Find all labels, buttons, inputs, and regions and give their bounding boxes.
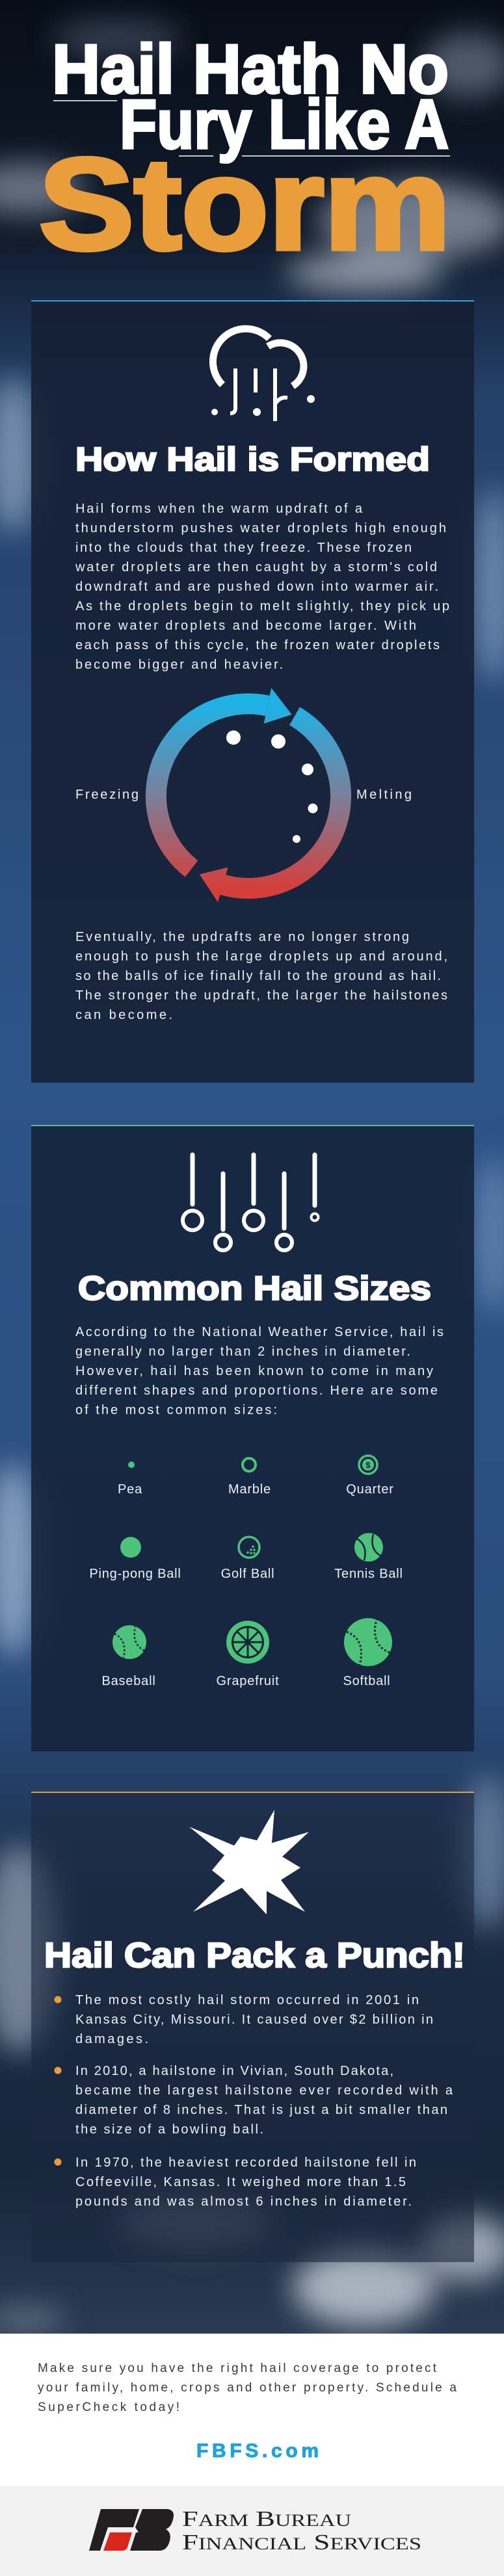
- bullet list: hail facts: became the largest hailstone ever recorded with a: [75, 2083, 453, 2098]
- icon: ping-pong ball: [120, 1537, 141, 1558]
- grid: hail sizes: Tennis Ball: [334, 1567, 403, 1581]
- text block: formation paragraph: Hail forms when the warm updraft of a: [75, 502, 363, 516]
- text block: formation paragraph: [75, 502, 449, 672]
- text block: eventually paragraph: can become.: [75, 1008, 172, 1022]
- grid: hail sizes: [89, 1456, 403, 1688]
- logo: Farm Bureau Financial Services: FARM B UREAU: [182, 2507, 351, 2531]
- icon: tennis ball: [354, 1533, 383, 1562]
- icon: quarter: [359, 1456, 377, 1474]
- text block: call to action: Make sure you have the right hail coverage to protect: [38, 2362, 437, 2375]
- icon: golf ball: [239, 1537, 259, 1558]
- grid: hail sizes: Golf Ball: [221, 1567, 274, 1581]
- link: FBFS.com: FBFS.com: [196, 2440, 319, 2462]
- logo: Farm Bureau Financial Services: FINANCIAL S ERVICES: [182, 2531, 421, 2555]
- chart: freezing/melting cycle: [75, 688, 412, 902]
- icon: hail cloud: [211, 329, 315, 421]
- text block: formation paragraph: downdraft and are pushed down into warmer air.: [75, 580, 438, 594]
- text block: eventually paragraph: [75, 930, 447, 1022]
- bullet list: hail facts: the size of a bowling ball.: [75, 2122, 263, 2137]
- icon: baseball: [113, 1625, 146, 1659]
- text block: eventually paragraph: Eventually, the updrafts are no longer strong: [75, 930, 409, 944]
- text block: sizes intro: However, hail has been known to come in many: [75, 1364, 433, 1378]
- bullet list: hail facts: Coffeeville, Kansas. It weighed more than 1.5: [75, 2175, 406, 2189]
- chart: freezing/melting cycle: Melting: [356, 788, 412, 802]
- text block: formation paragraph: become bigger and heavier.: [75, 658, 283, 672]
- text block: sizes intro: different shapes and proportions. Here are some: [75, 1384, 438, 1398]
- text block: formation paragraph: into the clouds that they freeze. These frozen: [75, 541, 412, 555]
- text block: call to action: SuperCheck today!: [38, 2401, 179, 2414]
- icon: starburst: [189, 1810, 309, 1914]
- bullet list: hail facts: [55, 1993, 453, 2209]
- bullet list: hail facts: In 2010, a hailstone in Vivian, South Dakota,: [75, 2064, 393, 2078]
- grid: hail sizes: Baseball: [101, 1674, 156, 1688]
- icon: pea: [128, 1462, 135, 1468]
- heading: How Hail is Formed: How Hail is Formed: [75, 441, 430, 478]
- text block: formation paragraph: water droplets are then caught by a storm's cold: [75, 560, 437, 574]
- bullet list: hail facts: diameter of 8 inches. That is just a bit smaller than: [75, 2103, 447, 2117]
- grid: hail sizes: Pea: [118, 1482, 142, 1497]
- icon: quarter: $: [365, 1460, 371, 1470]
- icon: grapefruit: [226, 1621, 269, 1664]
- grid: hail sizes: Softball: [343, 1674, 391, 1688]
- text block: formation paragraph: As the droplets begin to melt slightly, they pick up: [75, 599, 449, 613]
- text block: sizes intro: According to the National Weather Service, hail is: [75, 1325, 444, 1339]
- title: Storm: [39, 132, 451, 277]
- grid: hail sizes: Quarter: [346, 1482, 394, 1497]
- title: Fury Like A: [120, 85, 449, 163]
- panel: how hail is formed: [31, 301, 474, 1083]
- grid: hail sizes: Marble: [228, 1482, 271, 1497]
- logo: Farm Bureau Financial Services: [89, 2507, 421, 2555]
- bullet list: hail facts: The most costly hail storm occurred in 2001 in: [75, 1993, 419, 2007]
- text block: eventually paragraph: The stronger the updraft, the larger the hailstones: [75, 988, 447, 1003]
- text block: eventually paragraph: so the balls of ice finally fall to the ground as hail.: [75, 969, 441, 983]
- title: [39, 30, 451, 277]
- text block: sizes intro: generally no larger than 2 inches in diameter.: [75, 1345, 410, 1359]
- bullet list: hail facts: Kansas City, Missouri. It caused over $2 billion in: [75, 2013, 433, 2027]
- grid: hail sizes: Ping-pong Ball: [89, 1567, 181, 1581]
- text block: sizes intro: [75, 1325, 444, 1417]
- icon: softball: [344, 1618, 392, 1666]
- text block: formation paragraph: thunderstorm pushes water droplets high enough: [75, 521, 446, 535]
- icon: marble: [243, 1458, 256, 1471]
- text block: formation paragraph: more water droplets and become larger. With: [75, 619, 416, 633]
- grid: hail sizes: Grapefruit: [217, 1674, 279, 1688]
- bullet list: hail facts: pounds and was almost 6 inches in diameter.: [75, 2195, 412, 2209]
- bullet list: hail facts: In 1970, the heaviest recorded hailstone fell in: [75, 2156, 416, 2170]
- bullet list: hail facts: damages.: [75, 2032, 148, 2046]
- icon: falling hail: [183, 1155, 319, 1250]
- chart: freezing/melting cycle: Freezing: [75, 788, 139, 802]
- heading: Common Hail Sizes: Common Hail Sizes: [78, 1270, 431, 1307]
- text block: formation paragraph: each pass of this cycle, the frozen water droplets: [75, 638, 440, 652]
- text block: call to action: [38, 2362, 457, 2414]
- text block: call to action: your family, home, crops and other property. Schedule a: [38, 2381, 457, 2395]
- panel: hail can pack a punch: [31, 1792, 474, 2262]
- text block: eventually paragraph: enough to push the large droplets up and around,: [75, 949, 447, 964]
- panel: common hail sizes: [31, 1126, 474, 1751]
- heading: Hail Can Pack a Punch!: Hail Can Pack a Punch!: [44, 1936, 465, 1975]
- title: Hail Hath No: [52, 30, 449, 108]
- text block: sizes intro: of the most common sizes:: [75, 1403, 277, 1417]
